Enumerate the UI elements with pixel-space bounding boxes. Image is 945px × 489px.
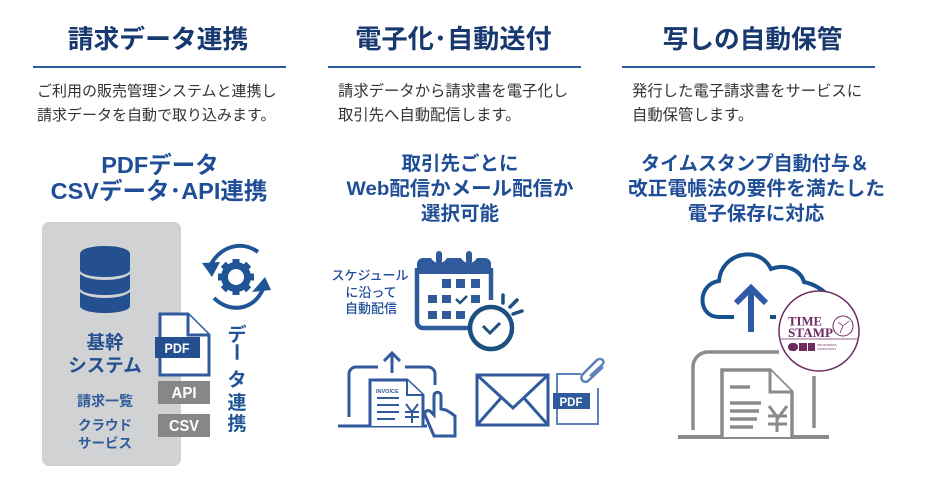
panel: core system bbox=[42, 222, 181, 466]
subheading: delivery selection: Web配信かメール配信か bbox=[346, 178, 574, 200]
subheading: timestamp and e-book law: 改正電帳法の要件を満たした bbox=[628, 178, 885, 200]
icon: database bbox=[80, 246, 130, 313]
label: scheduled delivery: 自動配信 bbox=[345, 301, 397, 316]
text block: column 1 description: 請求データを自動で取り込みます。 bbox=[37, 106, 276, 124]
icon: web invoice delivery bbox=[338, 353, 455, 436]
icon: PDF document: PDF bbox=[164, 340, 190, 356]
subheading: timestamp and e-book law bbox=[628, 153, 885, 225]
icon: envelope with PDF attachment: PDF bbox=[560, 397, 582, 409]
text block: column 3 description: 発行した電子請求書をサービスに bbox=[632, 82, 862, 100]
text block: column 3 description: 自動保管します。 bbox=[632, 106, 753, 124]
icon: time stamp seal: CONSULTANTS bbox=[817, 347, 836, 351]
subheading: timestamp and e-book law: タイムスタンプ自動付与＆ bbox=[641, 153, 869, 175]
icon: time stamp seal bbox=[779, 291, 859, 371]
icon: laptop with invoice bbox=[678, 352, 829, 437]
label: CSV: CSV bbox=[169, 418, 199, 435]
label: scheduled delivery bbox=[331, 268, 409, 316]
text block: column 3 description bbox=[632, 82, 862, 124]
label: cloud service: クラウド bbox=[78, 418, 132, 433]
text block: column 2 description: 取引先へ自動配信します。 bbox=[338, 106, 521, 124]
subheading: PDF and CSV data: PDFデータ bbox=[101, 151, 219, 178]
heading: 請求データ連携: 請求データ連携 bbox=[68, 24, 248, 54]
icon: PDF document bbox=[155, 314, 209, 375]
label: data linkage vertical: タ bbox=[227, 369, 247, 391]
icon: time stamp seal: STAMP bbox=[788, 325, 833, 340]
icon: gear with sync arrows bbox=[202, 246, 271, 308]
label: API bbox=[158, 381, 210, 404]
label: data linkage vertical: デ bbox=[227, 323, 247, 346]
label: core system: 基幹 bbox=[86, 332, 124, 353]
label: API: API bbox=[172, 385, 196, 402]
heading: 写しの自動保管: 写しの自動保管 bbox=[663, 25, 842, 54]
label: invoice list: 請求一覧 bbox=[77, 393, 133, 409]
text block: column 2 description: 請求データから請求書を電子化し bbox=[338, 81, 568, 100]
label: CSV bbox=[158, 414, 210, 437]
icon: time stamp seal: OBC BUSINESS bbox=[817, 343, 837, 347]
label: scheduled delivery: に沿って bbox=[345, 285, 397, 300]
label: scheduled delivery: スケジュール bbox=[331, 268, 409, 283]
icon: calendar with clock bbox=[417, 251, 522, 349]
icon: envelope with PDF attachment bbox=[477, 359, 603, 425]
text block: column 2 description bbox=[338, 81, 568, 124]
label: cloud service bbox=[78, 418, 132, 451]
heading: 電子化・自動送付: 電子化･自動送付 bbox=[355, 24, 552, 54]
label: data linkage vertical: ー bbox=[225, 342, 246, 362]
label: data linkage vertical: 携 bbox=[227, 413, 247, 435]
label: core system bbox=[68, 332, 142, 376]
subheading: timestamp and e-book law: 電子保存に対応 bbox=[688, 203, 825, 225]
icon: web invoice delivery: INVOICE bbox=[376, 389, 399, 395]
icon: time stamp seal: TIME bbox=[788, 314, 822, 328]
label: cloud service: サービス bbox=[78, 435, 132, 451]
text block: column 1 description: ご利用の販売管理システムと連携し bbox=[37, 82, 277, 100]
subheading: delivery selection: 選択可能 bbox=[421, 203, 499, 225]
subheading: delivery selection bbox=[346, 152, 574, 225]
label: data linkage vertical bbox=[225, 323, 247, 435]
subheading: PDF and CSV data: CSVデータ･API連携 bbox=[51, 177, 267, 204]
subheading: delivery selection: 取引先ごとに bbox=[401, 152, 519, 175]
icon: cloud upload bbox=[702, 254, 830, 332]
text block: column 1 description bbox=[37, 82, 277, 124]
label: core system: システム bbox=[68, 355, 142, 376]
subheading: PDF and CSV data bbox=[51, 151, 267, 204]
label: data linkage vertical: 連 bbox=[227, 392, 247, 414]
